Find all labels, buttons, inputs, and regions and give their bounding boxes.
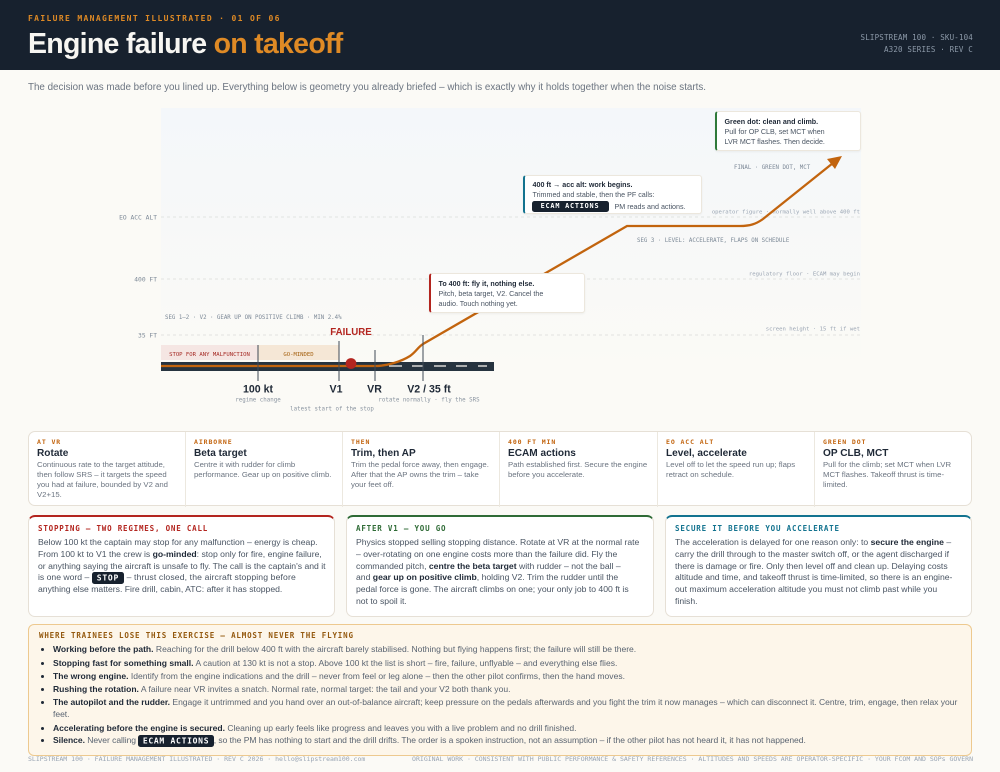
phase: rotate: Rotate [37, 448, 68, 458]
panel text: finish. [675, 596, 698, 606]
failure label: FAILURE [330, 327, 372, 338]
altitude labels: 35 FT [138, 332, 157, 340]
panel: stopping [28, 515, 335, 617]
header band [0, 0, 1000, 70]
phase: ecam: Path established first. Secure the engine [508, 460, 647, 468]
title: Engine failure on takeoff [28, 28, 343, 60]
phase: op clb: MCT flashes. Takeoff thrust is time- [823, 470, 944, 478]
flight path arrow [161, 156, 842, 366]
panel text: From 100 kt to V1 the crew is go-minded: stop only for fire, engine failure, [38, 549, 322, 559]
altitude labels: EO ACC ALT [119, 214, 157, 222]
phase: rotate [29, 432, 186, 507]
panel text: The acceleration is delayed for one reason only: to secure the engine – [675, 537, 951, 547]
speed labels: V1 [330, 384, 343, 396]
phase: op clb: Pull for the climb; set MCT when LVR [823, 460, 951, 468]
phase: op clb: limited. [823, 480, 848, 488]
speed sublabels: latest start of the stop [290, 406, 374, 412]
phase: trim: your feet off. [351, 480, 394, 488]
callout: 400 ft to acc alt [523, 175, 702, 214]
altitude labels: 400 FT [134, 276, 157, 284]
pill caption: PM reads and actions. [614, 202, 686, 210]
panel text: pedal force is gone. The aircraft climbs on one; your only job to 400 ft is [356, 584, 629, 594]
warning heading: WHERE TRAINEES LOSE THIS EXERCISE — ALMOST NEVER THE FLYING [39, 631, 354, 640]
panel text: or anything saying the aircraft is unsafe to fly. The call is the captain's and it [38, 561, 326, 571]
phase: op clb: OP CLB, MCT [823, 448, 888, 458]
phase: ecam: before you accelerate. [508, 470, 585, 478]
phase: trim: THEN [351, 438, 370, 446]
panel text: altitude and time, and takeoff thrust is time-limited, so there is an engine- [675, 572, 952, 582]
callout: to 400 ft [429, 273, 585, 313]
phase: trim: Trim the pedal force away, then engage. [351, 460, 489, 468]
product info [861, 33, 973, 54]
speed markers [258, 335, 423, 381]
phase: trim: Trim, then AP [351, 448, 416, 458]
panel text: out maximum acceleration altitude you must not climb past while you [675, 584, 937, 594]
warning list: feet. [53, 709, 70, 719]
speed labels: VR [367, 384, 382, 396]
panel text: Below 100 kt the captain may stop for any malfunction – energy is cheap. [38, 537, 318, 547]
segment labels [165, 165, 811, 321]
phase: trim [343, 432, 500, 507]
altitude line notes: regulatory floor · ECAM may begin [749, 272, 860, 278]
callout: green dot: Pull for OP CLB, set MCT when [724, 128, 825, 136]
warning list: Silence. Never calling ECAM ACTIONS , so the PM has nothing to start and the drill drifts. The order is a spoken instruction, not an assumption – if the other pilot has not heard it, it has not happened. [53, 735, 806, 745]
eyebrow: FAILURE MANAGEMENT ILLUSTRATED · 01 OF 06 [28, 14, 281, 23]
warning list: Stopping fast for something small. A caution at 130 kt is not a stop. Above 100 kt the list is short – fire, failure, unflyable – and everything else flies. [53, 658, 617, 668]
panel text: there is damage or fire. Only then level off and clean up. Delaying costs [675, 561, 948, 571]
phase: trim: After that the AP owns the trim – take [351, 470, 479, 478]
panel text: anything else matters. Fire drill, cabin, ATC: after it has stopped. [38, 584, 282, 594]
phase: level: Level off to let the speed run up; flaps [666, 460, 795, 468]
altitude line notes: operator figure · normally well above 400 ft [712, 210, 860, 216]
phase: ecam [500, 432, 658, 507]
segment labels: SEG 1–2 · V2 · GEAR UP ON POSITIVE CLIMB · MIN 2.4% [165, 315, 342, 321]
action pill [532, 201, 608, 212]
altitude line notes [712, 210, 860, 332]
segment labels: SEG 3 · LEVEL: ACCELERATE, FLAPS ON SCHEDULE [637, 238, 790, 244]
speed sublabels [235, 398, 480, 412]
panel heading: SECURE IT BEFORE YOU ACCELERATE [675, 524, 840, 533]
product info: A320 SERIES · REV C [884, 45, 973, 54]
speed labels [243, 384, 451, 396]
panel: after v1 [346, 515, 654, 617]
phase strip [28, 431, 972, 506]
phase: beta target: performance. Gear up on positive climb. [194, 470, 331, 478]
failure dot [346, 358, 356, 369]
panel text: Physics stopped selling stopping distance. Rotate at VR at the normal rate [356, 537, 639, 547]
panel: where trainees lose this exercise [28, 624, 972, 756]
callout: green dot [715, 111, 861, 151]
phase: op clb [823, 438, 951, 488]
panel text: is one word – STOP – thrust closed, the aircraft stopping before [38, 572, 296, 582]
speed sublabels: rotate normally · fly the SRS [378, 398, 480, 404]
warning list: The autopilot and the rudder. Engage it untrimmed and you hand over an out-of-balance aircraft; keep pressure on the pedals afterwards and you fight the trim it now manages – which can disconnect it. Centre, trim, engage, then relax your [53, 697, 957, 707]
phase: beta target: Centre it with rudder for climb [194, 460, 295, 468]
runway [161, 362, 494, 371]
panel text: commanded pitch, centre the beta target with rudder – not the ball – [356, 561, 621, 571]
footer left: SLIPSTREAM 100 · FAILURE MANAGEMENT ILLUSTRATED · REV C 2026 · hello@slipstream100.com [28, 755, 365, 763]
panel heading: AFTER V1 — YOU GO [356, 524, 446, 533]
warning list: The wrong engine. Identify from the engine indications and the drill – never from feel or leg alone – then the other pilot confirms, then the hand moves. [53, 670, 625, 680]
warning list: Working before the path. Reaching for the drill below 400 ft with the aircraft barely stabilised. Nothing but flying happens first; the failure will still be there. [53, 644, 636, 654]
segment labels: FINAL · GREEN DOT, MCT [734, 165, 811, 171]
phase: level: EO ACC ALT [666, 438, 714, 446]
panel: secure [665, 515, 972, 617]
altitude line notes: screen height · 15 ft if wet [766, 326, 860, 332]
phase: ecam: ECAM actions [508, 448, 576, 458]
speed labels: 100 kt [243, 384, 273, 396]
panel text: carry the drill through to the master switch off, or the agent discharged if [675, 549, 949, 559]
altitude labels [119, 214, 157, 340]
panel text [675, 537, 952, 606]
phase: rotate: V2+15. [37, 490, 62, 498]
phase: level: Level, accelerate [666, 448, 747, 458]
callout: to 400 ft: To 400 ft: fly it, nothing else. [438, 280, 534, 288]
footer right: ORIGINAL WORK · CONSISTENT WITH PUBLIC PERFORMANCE & SAFETY REFERENCES · ALTITUDES AND SPEEDS ARE OPERATOR-SPECIFIC · YOUR FCOM AND SOPs GOVERN [412, 755, 973, 763]
panel heading: STOPPING — TWO REGIMES, ONE CALL [38, 524, 208, 533]
callout: to 400 ft: Pitch, beta target, V2. Cancel the [438, 290, 543, 298]
phase: beta target: AIRBORNE [194, 438, 233, 446]
intro text: The decision was made before you lined up. Everything below is geometry you already briefed – which is exactly why it holds together when the noise starts. [28, 82, 706, 93]
phase: rotate: AT VR [37, 438, 61, 446]
action pill: ECAM ACTIONS [541, 202, 599, 210]
panel text [38, 537, 326, 594]
panel text: – over-rotating on one engine costs more than the failure did. Fly the [356, 549, 617, 559]
callout: 400 ft to acc alt: Trimmed and stable, then the PF calls: [532, 191, 654, 199]
phase: op clb: GREEN DOT [823, 438, 866, 446]
panel text [356, 537, 639, 606]
callout: green dot: LVR MCT flashes. Then decide. [724, 138, 825, 146]
go-minded zone [258, 345, 339, 360]
chart: takeoff flight path [119, 111, 861, 412]
speed sublabels: regime change [235, 398, 281, 404]
phase: beta target [186, 432, 343, 507]
phase: beta target: Beta target [194, 448, 247, 458]
stop zone: STOP FOR ANY MALFUNCTION [169, 352, 250, 358]
go-minded zone: GO-MINDED [283, 352, 314, 358]
warning list: Rushing the rotation. A failure near VR invites a snatch. Normal rate, normal target: the tail and your V2 both thank you. [53, 684, 510, 694]
panel text: and gear up on positive climb, holding V2. Trim the rudder until the [356, 572, 618, 582]
warning list [41, 644, 958, 747]
callout: green dot: Green dot: clean and climb. [724, 118, 818, 126]
phase: rotate: you had at failure, bounded by V2 and [37, 480, 168, 488]
phase: level [658, 432, 815, 507]
panel text: not to spoil it. [356, 596, 407, 606]
phase: ecam: 400 FT MIN [508, 438, 556, 446]
phase: rotate: Continuous rate to the target attitude, [37, 460, 165, 468]
phase: level: retract on schedule. [666, 470, 734, 478]
callout: 400 ft to acc alt: 400 ft → acc alt: work begins. [532, 181, 633, 189]
phase: rotate: then follow SRS – it targets the speed [37, 470, 167, 478]
callout: to 400 ft: audio. Touch nothing yet. [438, 300, 518, 308]
stop zone [161, 345, 258, 360]
product info: SLIPSTREAM 100 · SKU-104 [861, 33, 973, 42]
warning list: Accelerating before the engine is secured. Cleaning up early feels like progress and leaves you with a live problem and no drill finished. [53, 722, 577, 732]
speed labels: V2 / 35 ft [407, 384, 451, 396]
